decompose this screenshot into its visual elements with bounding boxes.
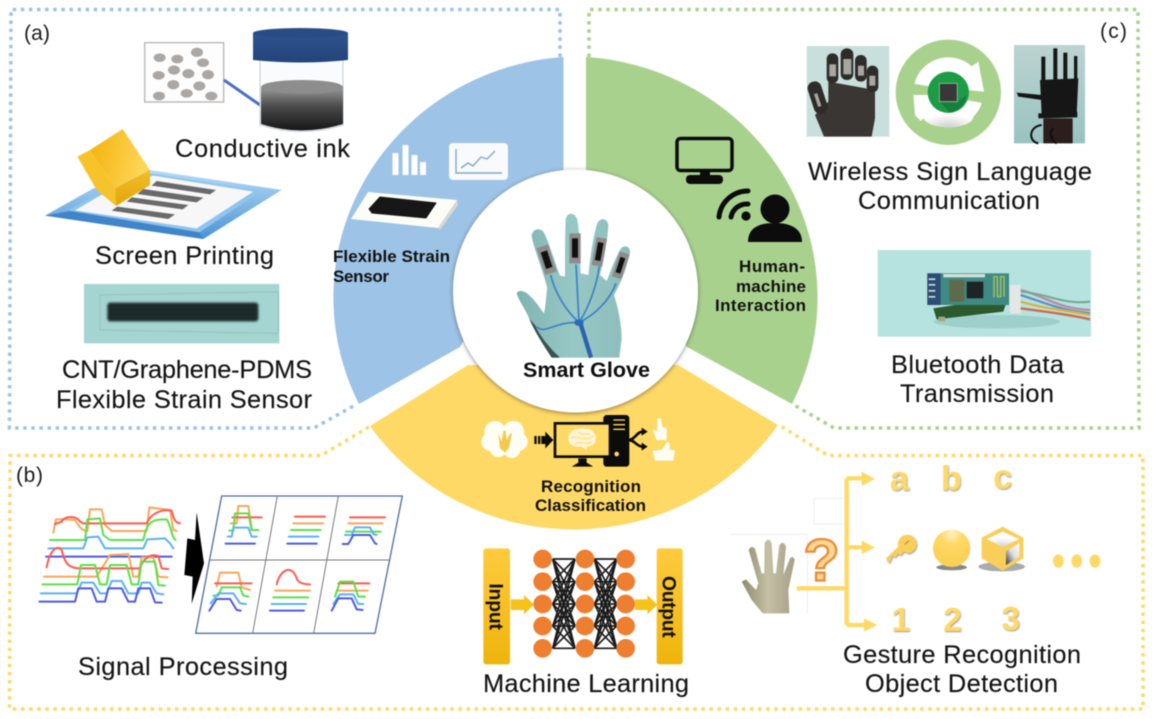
squeegee xyxy=(77,129,150,206)
label: CNT/Graphene-PDMS flexible strain sensor: Flexible Strain Sensor xyxy=(56,386,313,414)
label: conductive ink: Conductive ink xyxy=(175,135,350,163)
label: signal processing: Signal Processing xyxy=(78,653,288,681)
heading: Smart Glove: Smart Glove xyxy=(523,358,650,382)
label: flexible strain sensor: Sensor xyxy=(333,267,389,286)
sector: recognition classification xyxy=(370,365,778,529)
input block: Input xyxy=(484,583,505,631)
label: gesture recognition object detection: Gesture Recognition xyxy=(843,641,1081,669)
icon: question mark: ? xyxy=(803,527,840,594)
icon: conductive ink particles inset xyxy=(145,43,224,102)
network nodes xyxy=(533,550,635,658)
output block xyxy=(657,548,683,664)
icon: ink jar xyxy=(253,28,348,132)
photo: bluetooth module xyxy=(878,250,1091,337)
numbers 1 2 3: 2 xyxy=(943,602,962,639)
input arrow xyxy=(511,595,534,614)
connector line from inset to jar xyxy=(224,80,260,105)
icon: monitor xyxy=(677,138,732,184)
icon: beige hand xyxy=(742,540,795,613)
faint image frames xyxy=(730,498,844,613)
icon: sensor on white plate xyxy=(351,192,458,230)
output arrow xyxy=(635,595,657,614)
chart: segmented signal grid xyxy=(196,496,402,633)
input block xyxy=(483,548,510,664)
label: bluetooth data transmission: Transmission xyxy=(900,380,1054,408)
diagram: gesture recognition xyxy=(730,458,1100,639)
label: recognition classification: Classification xyxy=(535,496,646,515)
letters a b c: a xyxy=(890,460,910,498)
label: machine learning: Machine Learning xyxy=(483,670,689,698)
icon: recognition pipeline xyxy=(481,415,675,467)
icon: wifi and person xyxy=(719,191,802,242)
icon: white bar chart xyxy=(392,145,426,175)
label: screen printing: Screen Printing xyxy=(95,242,274,270)
icon: black lightning arrow xyxy=(184,512,204,604)
screen frame xyxy=(45,170,282,239)
label: wireless sign language communication: Wireless Sign Language xyxy=(808,158,1092,186)
label: bluetooth data transmission xyxy=(891,351,1065,408)
label: gesture recognition object detection: Object Detection xyxy=(865,670,1058,698)
icon: branching arrows xyxy=(628,428,648,451)
label: human-machine interaction: Interaction xyxy=(715,296,806,315)
icon: arrow into computer xyxy=(534,432,553,448)
icon: smart glove hand xyxy=(517,214,630,358)
signal processing illustration xyxy=(39,496,402,633)
branching arrows xyxy=(797,472,877,632)
label: human-machine interaction: Human- xyxy=(739,257,805,276)
photo: sensor glove xyxy=(806,46,889,137)
icon: tower case xyxy=(603,415,629,467)
label: wireless sign language communication xyxy=(808,158,1092,215)
label: flexible strain sensor: Flexible Strain xyxy=(333,247,450,266)
sector: human-machine interaction xyxy=(586,57,818,404)
panel label: (b): (b) xyxy=(16,464,43,487)
ellipsis dots xyxy=(1053,554,1100,568)
icons: key, sphere and cube xyxy=(886,527,1025,571)
numbers 1 2 3: 1 xyxy=(892,602,910,639)
numbers 1 2 3 xyxy=(892,601,1020,639)
icon: white hands xyxy=(653,418,675,461)
numbers 1 2 3: 3 xyxy=(1002,601,1020,638)
icon: chip with cycle arrows xyxy=(896,40,1001,145)
sector: flexible strain sensor xyxy=(333,57,564,404)
center circle xyxy=(453,170,698,412)
label: CNT/Graphene-PDMS flexible strain sensor xyxy=(56,356,313,414)
diagram: neural network xyxy=(483,548,683,664)
icon: key xyxy=(886,535,917,563)
printed stripes xyxy=(112,181,216,219)
label: recognition classification: Recognition xyxy=(541,477,641,496)
panel: (a) dotted border xyxy=(10,10,560,428)
panel (c) photos xyxy=(878,45,1091,337)
letters a b c: c xyxy=(993,458,1012,496)
label: human-machine interaction: machine xyxy=(736,277,806,296)
icon: screen printing xyxy=(45,129,282,239)
photo: robotic hand xyxy=(1014,45,1085,143)
panel label: (c): (c) xyxy=(1100,20,1127,43)
photo: strain sensor sample xyxy=(84,284,279,343)
label: CNT/Graphene-PDMS flexible strain sensor: CNT/Graphene-PDMS xyxy=(62,356,312,384)
icon: line chart card xyxy=(449,143,508,180)
network edges xyxy=(553,559,617,648)
label: recognition classification xyxy=(535,477,646,515)
panel label: (a): (a) xyxy=(24,22,50,45)
panel: (c) dotted border xyxy=(589,10,1139,428)
label: wireless sign language communication: Communication xyxy=(858,187,1040,215)
label: human-machine interaction xyxy=(715,257,806,315)
chart: raw signals xyxy=(39,507,180,603)
panel: (b) dotted border xyxy=(10,425,1143,709)
icon: cube xyxy=(978,527,1025,571)
label: gesture recognition object detection xyxy=(843,641,1081,698)
output block: Output xyxy=(658,576,679,638)
icon: white cloud with hand xyxy=(481,421,528,458)
icon: sphere xyxy=(933,530,970,570)
label: flexible strain sensor xyxy=(333,247,450,286)
letters a b c xyxy=(890,458,1012,498)
label: bluetooth data transmission: Bluetooth Data xyxy=(891,351,1065,379)
letters a b c: b xyxy=(941,460,962,498)
icon: computer monitor with brain xyxy=(555,423,610,467)
